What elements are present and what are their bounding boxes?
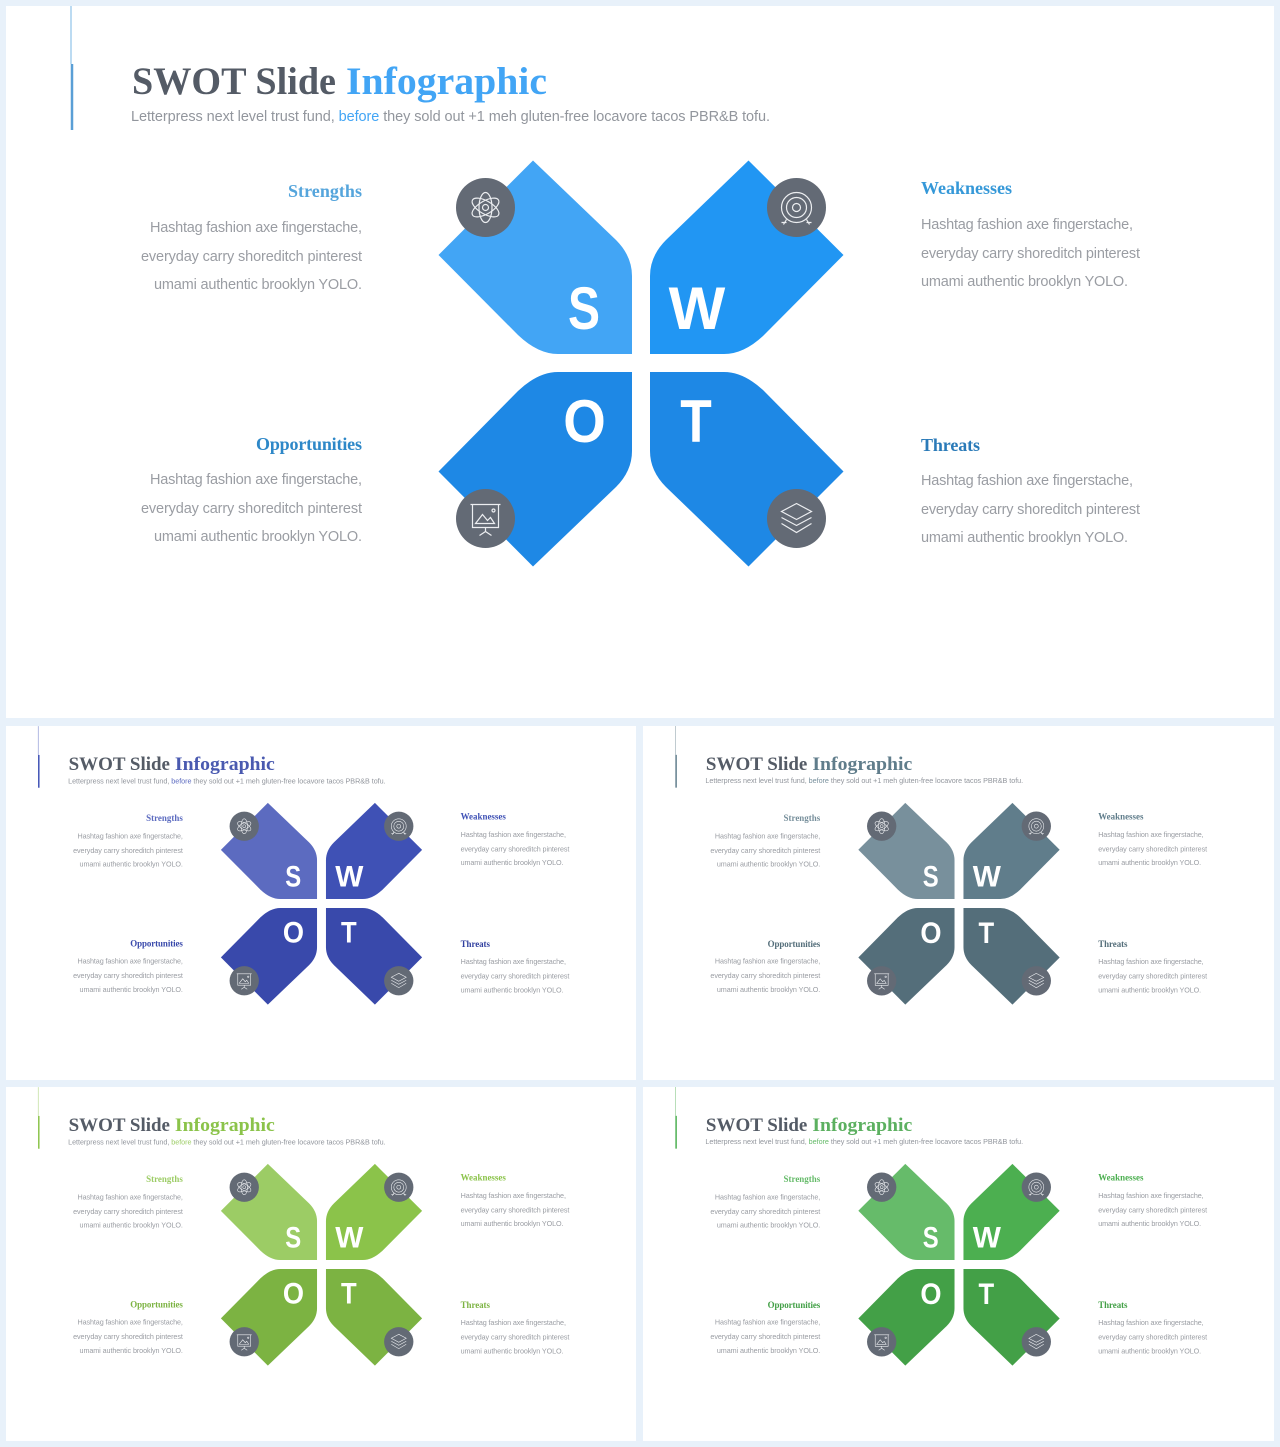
text block: weaknesses: everyday carry shoreditch pinterest xyxy=(461,1205,569,1214)
text block: weaknesses: umami authentic brooklyn YOLO. xyxy=(461,858,563,867)
text block: threats: Threats xyxy=(921,435,980,455)
SWOT diagram xyxy=(221,803,422,1005)
text block: threats xyxy=(1098,1300,1207,1355)
title xyxy=(706,754,913,775)
letters: T xyxy=(680,388,712,455)
text block: weaknesses: Hashtag fashion axe fingerstache, xyxy=(921,217,1133,233)
text block: opportunities: Opportunities xyxy=(130,939,183,949)
icon: target xyxy=(1022,812,1051,841)
text block: strengths xyxy=(73,813,183,869)
text block: weaknesses: Weaknesses xyxy=(1098,1172,1144,1182)
text block: threats: Hashtag fashion axe fingerstache, xyxy=(921,473,1133,489)
text block: weaknesses: Hashtag fashion axe fingerstache, xyxy=(461,1191,566,1200)
text block: weaknesses: umami authentic brooklyn YOLO. xyxy=(921,274,1128,290)
text block: weaknesses: umami authentic brooklyn YOLO. xyxy=(461,1219,563,1228)
text block: strengths: umami authentic brooklyn YOLO. xyxy=(717,1221,820,1230)
title: SWOT Slide xyxy=(706,1115,808,1136)
text block: opportunities xyxy=(73,1300,183,1355)
text block: strengths: Strengths xyxy=(146,1174,183,1184)
petal O xyxy=(858,908,955,1005)
text block: threats: umami authentic brooklyn YOLO. xyxy=(461,1346,563,1355)
text block: threats: everyday carry shoreditch pinterest xyxy=(461,1333,569,1342)
letters: O xyxy=(920,1278,941,1311)
icon: atom xyxy=(456,178,515,237)
text block: threats: Threats xyxy=(461,1300,490,1310)
text block: weaknesses: Weaknesses xyxy=(921,178,1012,198)
text block: opportunities: Hashtag fashion axe fingerstache, xyxy=(78,957,183,966)
petal O xyxy=(221,908,317,1005)
text block: strengths: Hashtag fashion axe fingerstache, xyxy=(78,831,183,840)
text block: threats: Hashtag fashion axe fingerstache, xyxy=(1098,1318,1204,1327)
SWOT diagram xyxy=(221,1164,422,1366)
accent line xyxy=(675,1087,677,1149)
text block: strengths xyxy=(141,181,362,293)
subtitle: Letterpress next level trust fund, before they sold out +1 meh gluten-free locavore tacos PBR&B tofu. xyxy=(705,1137,1023,1146)
text block: opportunities: everyday carry shoreditch pinterest xyxy=(710,971,820,980)
title: SWOT Slide xyxy=(69,754,170,775)
letters: T xyxy=(979,917,994,950)
icon: presentation xyxy=(230,1327,259,1356)
letters: W xyxy=(335,861,364,894)
icon: atom xyxy=(867,1173,896,1202)
accent line xyxy=(37,1087,40,1149)
letters: T xyxy=(341,917,357,950)
SWOT diagram xyxy=(858,1164,1060,1366)
text block: strengths: Strengths xyxy=(146,813,183,823)
petal T xyxy=(963,1269,1060,1366)
text block: strengths: umami authentic brooklyn YOLO. xyxy=(154,277,362,293)
icon: atom xyxy=(867,812,896,841)
text block: opportunities xyxy=(141,434,362,545)
text block: strengths: Strengths xyxy=(783,1174,821,1184)
text block: opportunities: everyday carry shoreditch pinterest xyxy=(73,971,183,980)
text block: opportunities: Hashtag fashion axe fingerstache, xyxy=(715,1318,820,1327)
SWOT diagram xyxy=(438,160,844,566)
text block: weaknesses: Weaknesses xyxy=(461,1173,506,1183)
text block: opportunities xyxy=(73,939,183,994)
petal S xyxy=(221,803,317,899)
text block: weaknesses: everyday carry shoreditch pinterest xyxy=(461,844,569,853)
panel: light green slide xyxy=(6,1087,636,1441)
letters: O xyxy=(283,917,304,950)
petal O xyxy=(438,372,632,566)
text block: strengths xyxy=(710,1174,821,1230)
icon: presentation xyxy=(230,966,259,995)
icon: target xyxy=(384,1173,413,1202)
text block: threats: Threats xyxy=(1098,939,1128,949)
text block: strengths xyxy=(73,1174,183,1230)
petal S xyxy=(438,160,632,354)
icon: layers xyxy=(1022,966,1051,995)
text block: opportunities: everyday carry shoreditch pinterest xyxy=(710,1332,820,1341)
icon: target xyxy=(767,178,826,237)
icon: layers xyxy=(767,489,826,548)
text block: weaknesses xyxy=(461,1173,569,1228)
icon: presentation xyxy=(456,489,515,548)
text block: opportunities: Opportunities xyxy=(130,1300,183,1310)
subtitle: Letterpress next level trust fund, before they sold out +1 meh gluten-free locavore tacos PBR&B tofu. xyxy=(705,776,1023,785)
title: SWOT Slide xyxy=(69,1115,170,1136)
letters: S xyxy=(923,861,939,894)
text block: strengths: everyday carry shoreditch pinterest xyxy=(710,1207,820,1216)
text block: opportunities: Hashtag fashion axe fingerstache, xyxy=(78,1318,183,1327)
title: Infographic xyxy=(175,754,275,775)
title: Infographic xyxy=(812,754,913,775)
text block: strengths: Hashtag fashion axe fingerstache, xyxy=(150,220,362,236)
letters: S xyxy=(285,861,301,894)
petal S xyxy=(858,803,955,899)
title xyxy=(69,1115,275,1136)
subtitle: Letterpress next level trust fund, before they sold out +1 meh gluten-free locavore tacos PBR&B tofu. xyxy=(68,1137,386,1146)
title: Infographic xyxy=(175,1115,275,1136)
petal S xyxy=(221,1164,317,1260)
text block: weaknesses xyxy=(1098,1172,1207,1228)
icon: target xyxy=(1022,1173,1051,1202)
text block: strengths: everyday carry shoreditch pinterest xyxy=(141,249,362,265)
text block: opportunities: umami authentic brooklyn YOLO. xyxy=(717,1346,820,1355)
petal T xyxy=(326,1269,422,1366)
title: Infographic xyxy=(812,1115,913,1136)
text block: weaknesses: Weaknesses xyxy=(461,812,506,822)
text block: threats: everyday carry shoreditch pinterest xyxy=(1098,972,1207,981)
letters: O xyxy=(563,388,606,455)
panel: indigo slide xyxy=(6,726,636,1080)
title xyxy=(706,1115,913,1136)
text block: strengths xyxy=(710,813,821,869)
petal W xyxy=(650,160,844,354)
icon: layers xyxy=(384,1327,413,1356)
petal T xyxy=(326,908,422,1005)
title: SWOT Slide xyxy=(706,754,808,775)
text block: opportunities: Hashtag fashion axe fingerstache, xyxy=(715,957,820,966)
text block: threats xyxy=(461,939,569,994)
letters: O xyxy=(920,917,941,950)
text block: threats: Threats xyxy=(1098,1300,1128,1310)
petal W xyxy=(963,1164,1060,1260)
petal W xyxy=(326,1164,422,1260)
text block: strengths: everyday carry shoreditch pinterest xyxy=(73,1207,183,1216)
text block: threats: everyday carry shoreditch pinterest xyxy=(1098,1333,1207,1342)
text block: weaknesses: Weaknesses xyxy=(1098,811,1144,821)
text block: weaknesses: umami authentic brooklyn YOLO. xyxy=(1098,1219,1201,1228)
text block: opportunities: Opportunities xyxy=(768,1300,821,1310)
text block: opportunities: everyday carry shoreditch pinterest xyxy=(141,501,362,517)
icon: presentation xyxy=(867,1327,896,1356)
text block: strengths: everyday carry shoreditch pinterest xyxy=(73,846,183,855)
accent line xyxy=(675,726,677,788)
letters: W xyxy=(669,275,726,342)
letters: T xyxy=(341,1278,357,1311)
icon: atom xyxy=(230,1173,259,1202)
text block: weaknesses xyxy=(921,178,1140,290)
SWOT diagram xyxy=(858,803,1060,1005)
text block: opportunities: Opportunities xyxy=(768,939,821,949)
icon: layers xyxy=(1022,1327,1051,1356)
accent line xyxy=(71,6,72,130)
text block: weaknesses: umami authentic brooklyn YOLO. xyxy=(1098,858,1201,867)
text block: strengths: Hashtag fashion axe fingerstache, xyxy=(715,831,820,840)
text block: strengths: Hashtag fashion axe fingerstache, xyxy=(78,1192,183,1201)
subtitle: Letterpress next level trust fund, before they sold out +1 meh gluten-free locavore tacos PBR&B tofu. xyxy=(131,109,770,125)
icon: presentation xyxy=(867,966,896,995)
text block: opportunities: umami authentic brooklyn YOLO. xyxy=(154,529,362,545)
letters xyxy=(920,861,1002,950)
text block: threats: everyday carry shoreditch pinterest xyxy=(921,502,1140,518)
text block: threats: umami authentic brooklyn YOLO. xyxy=(1098,985,1201,994)
petal S xyxy=(858,1164,955,1260)
text block: opportunities xyxy=(710,939,821,994)
icon: target xyxy=(384,812,413,841)
text block: opportunities: umami authentic brooklyn YOLO. xyxy=(80,985,183,994)
text block: threats: umami authentic brooklyn YOLO. xyxy=(1098,1346,1201,1355)
petal W xyxy=(326,803,422,899)
text block: strengths: everyday carry shoreditch pinterest xyxy=(710,846,820,855)
letters xyxy=(283,1222,364,1311)
panel: blue grey slide xyxy=(643,726,1274,1080)
text block: opportunities xyxy=(710,1300,821,1355)
text block: threats xyxy=(921,435,1140,546)
text block: strengths: Strengths xyxy=(783,813,821,823)
letters: T xyxy=(979,1278,994,1311)
text block: weaknesses: Hashtag fashion axe fingerstache, xyxy=(1098,1191,1204,1200)
text block: weaknesses: everyday carry shoreditch pinterest xyxy=(1098,844,1207,853)
letters: O xyxy=(283,1278,304,1311)
text block: threats xyxy=(461,1300,569,1355)
text block: threats xyxy=(1098,939,1207,994)
letters xyxy=(563,275,726,455)
text block: opportunities: umami authentic brooklyn YOLO. xyxy=(80,1346,183,1355)
text block: weaknesses xyxy=(1098,811,1207,867)
petal T xyxy=(963,908,1060,1005)
letters xyxy=(283,861,364,950)
text block: opportunities: Opportunities xyxy=(256,434,362,454)
text block: weaknesses: everyday carry shoreditch pinterest xyxy=(921,246,1140,262)
text block: threats: umami authentic brooklyn YOLO. xyxy=(921,530,1128,546)
letters xyxy=(920,1222,1002,1311)
panel: green slide xyxy=(643,1087,1274,1441)
petal T xyxy=(650,372,844,566)
text block: threats: Hashtag fashion axe fingerstache, xyxy=(461,1318,566,1327)
title: Infographic xyxy=(346,60,547,103)
text block: threats: Hashtag fashion axe fingerstache, xyxy=(461,957,566,966)
petal O xyxy=(221,1269,317,1366)
text block: weaknesses: Hashtag fashion axe fingerstache, xyxy=(1098,830,1204,839)
title: SWOT Slide xyxy=(132,60,336,103)
text block: threats: umami authentic brooklyn YOLO. xyxy=(461,985,563,994)
accent line xyxy=(37,726,40,788)
letters: S xyxy=(923,1222,939,1255)
text block: strengths: umami authentic brooklyn YOLO. xyxy=(80,860,183,869)
text block: strengths: umami authentic brooklyn YOLO. xyxy=(717,860,820,869)
text block: threats: everyday carry shoreditch pinterest xyxy=(461,972,569,981)
icon: layers xyxy=(384,966,413,995)
title xyxy=(132,60,547,103)
text block: threats: Hashtag fashion axe fingerstache, xyxy=(1098,957,1204,966)
text block: weaknesses xyxy=(461,812,569,867)
text block: strengths: umami authentic brooklyn YOLO. xyxy=(80,1221,183,1230)
petal W xyxy=(963,803,1060,899)
text block: opportunities: everyday carry shoreditch pinterest xyxy=(73,1332,183,1341)
letters: W xyxy=(973,861,1002,894)
text block: opportunities: Hashtag fashion axe fingerstache, xyxy=(150,472,362,488)
letters: S xyxy=(285,1222,301,1255)
petal O xyxy=(858,1269,955,1366)
letters: W xyxy=(973,1222,1002,1255)
letters: S xyxy=(568,275,600,342)
text block: weaknesses: Hashtag fashion axe fingerstache, xyxy=(461,830,566,839)
panel: main slide blue xyxy=(6,6,1274,718)
text block: weaknesses: everyday carry shoreditch pinterest xyxy=(1098,1205,1207,1214)
text block: threats: Threats xyxy=(461,939,490,949)
icon: atom xyxy=(230,812,259,841)
letters: W xyxy=(335,1222,364,1255)
title xyxy=(69,754,275,775)
text block: opportunities: umami authentic brooklyn YOLO. xyxy=(717,985,820,994)
text block: strengths: Strengths xyxy=(288,181,362,201)
subtitle: Letterpress next level trust fund, before they sold out +1 meh gluten-free locavore tacos PBR&B tofu. xyxy=(68,776,386,785)
text block: strengths: Hashtag fashion axe fingerstache, xyxy=(715,1192,820,1201)
